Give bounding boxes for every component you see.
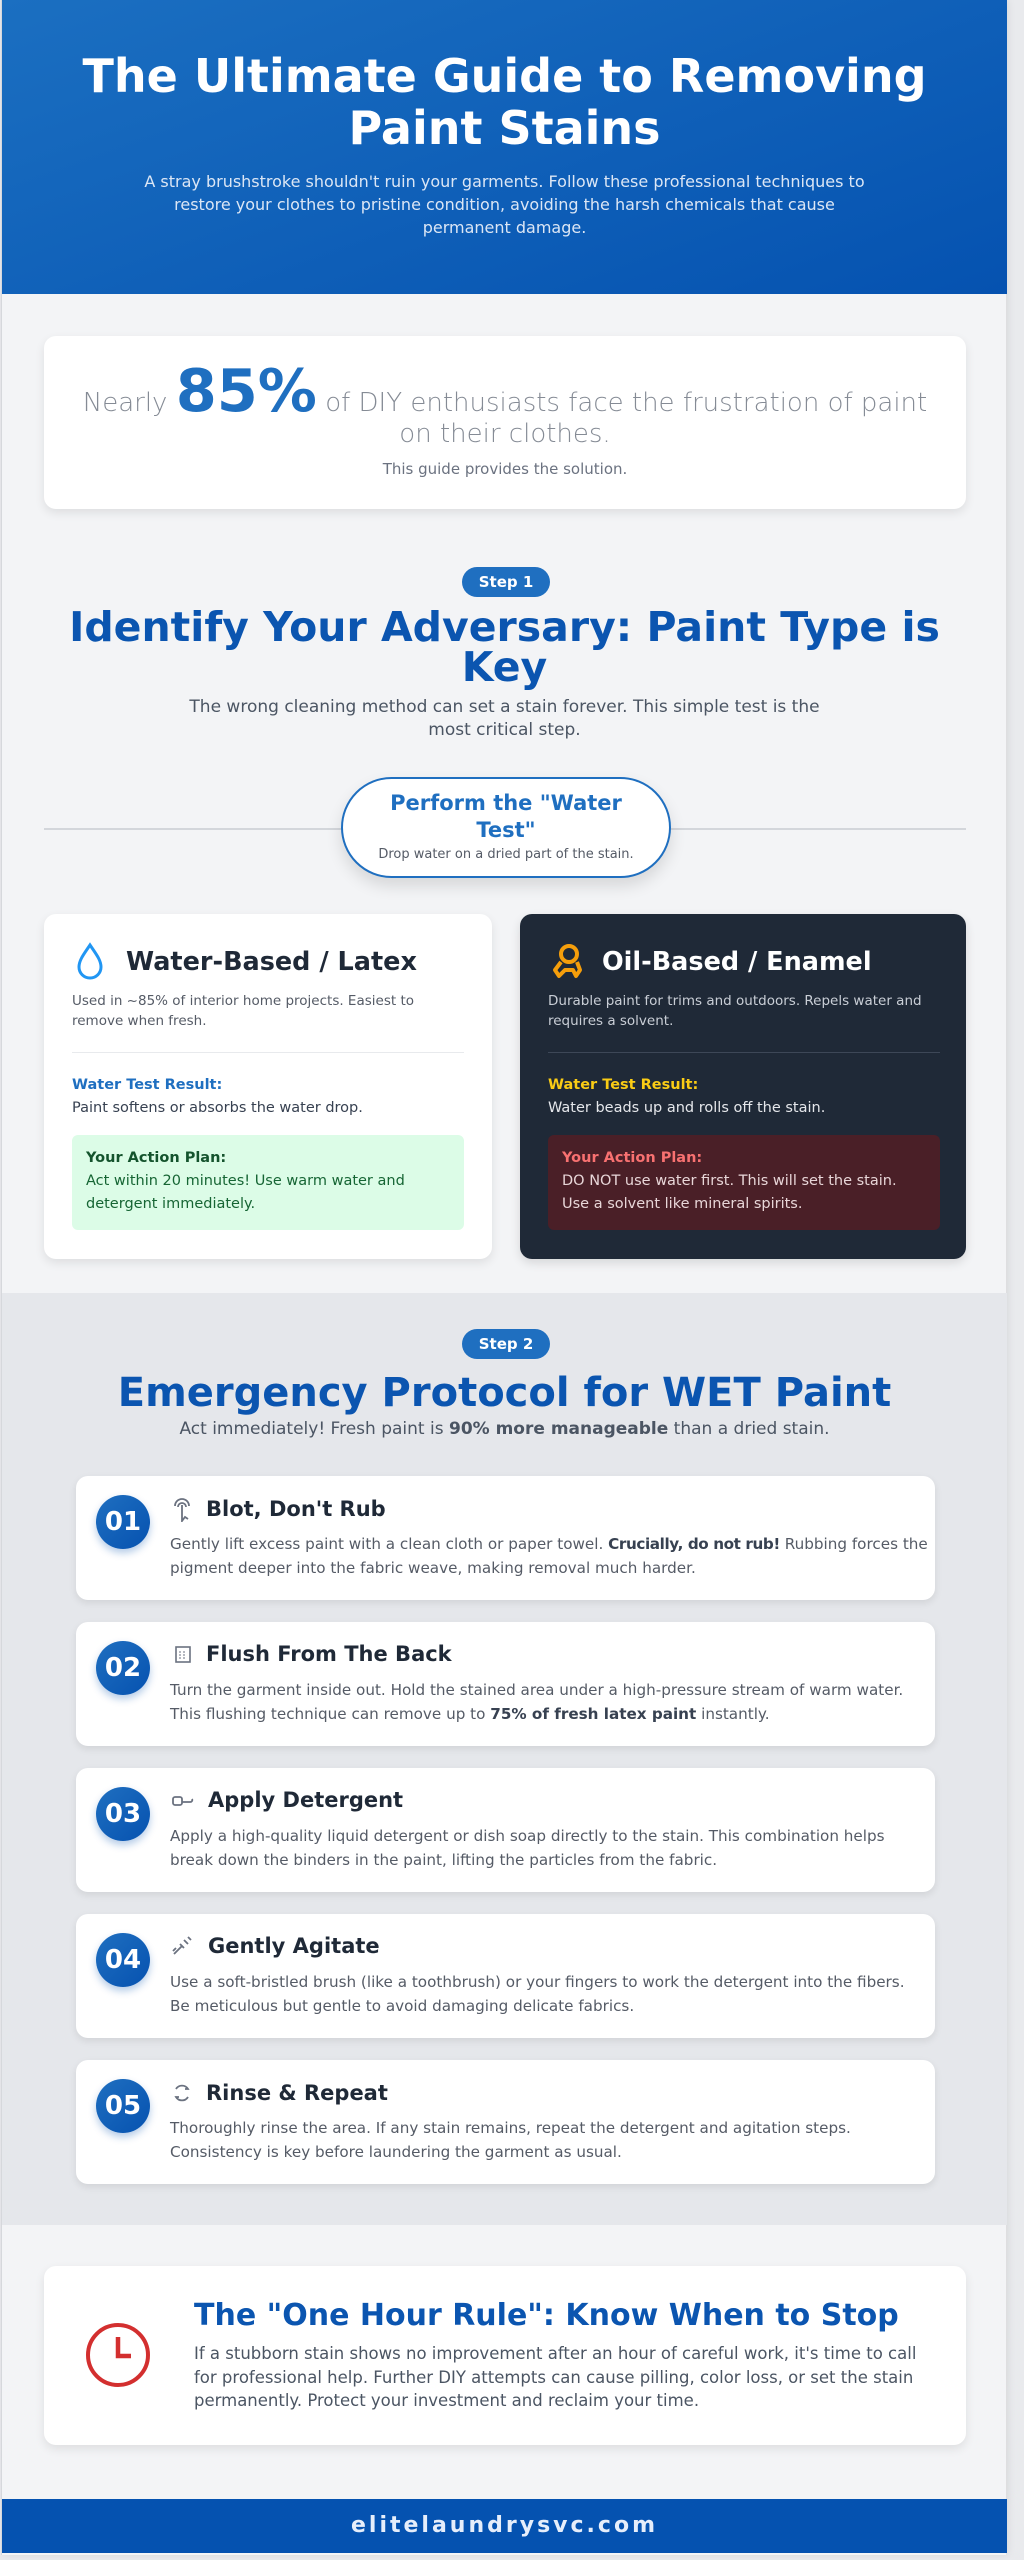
- step 03: 03: [105, 1799, 141, 1829]
- step 2 subtitle: Act immediately! Fresh paint is 90% more manageable than a dried stain.: [179, 1419, 830, 1439]
- step 01: Blot, Don't Rub: [206, 1497, 386, 1521]
- test result: Water Test Result:: [72, 1077, 222, 1093]
- action plan: Your Action Plan:: [562, 1150, 702, 1166]
- step 01: 01: [105, 1507, 141, 1537]
- step 03: Apply Detergent: [208, 1788, 403, 1812]
- step 1 badge: Step 1: [479, 573, 533, 591]
- step 04: [76, 1914, 935, 2038]
- test result: Water Test Result:: [548, 1077, 698, 1093]
- step 02: Flush From The Back: [206, 1642, 452, 1666]
- action plan: [548, 1135, 940, 1230]
- footer: elitelaundrysvc.com: [351, 2513, 658, 2538]
- stat text: Nearly 85% of DIY enthusiasts face the frustration of paint on their clothes.: [83, 356, 927, 449]
- header: [2, 0, 1007, 294]
- step 05: Rinse & Repeat: [206, 2081, 388, 2105]
- title: The Ultimate Guide to Removing Paint Stains: [82, 49, 926, 155]
- step 1 subtitle: The wrong cleaning method can set a stain forever. This simple test is the most critical step.: [189, 697, 820, 740]
- subtitle: A stray brushstroke shouldn't ruin your garments. Follow these professional techniques to restore your clothes to pristine condition, avoiding the harsh chemicals that cause permanent damage.: [144, 172, 865, 237]
- test result: [548, 1077, 825, 1116]
- panel: water-based: [44, 914, 492, 1259]
- action plan: Your Action Plan:: [86, 1150, 226, 1166]
- rule text: If a stubborn stain shows no improvement after an hour of careful work, it's time to call for professional help. Further DIY attempts can cause pilling, color loss, or set the stain permanently. Protect your investment and reclaim your time.: [194, 2344, 916, 2410]
- section: step 2: [2, 1293, 1007, 2225]
- icon: clock: [86, 2323, 150, 2387]
- card title: Water-Based / Latex: [126, 947, 417, 977]
- step 04: Use a soft-bristled brush (like a toothbrush) or your fingers to work the detergent into the fibers. Be meticulous but gentle to avoid damaging delicate fabrics.: [170, 1973, 905, 2015]
- action plan: DO NOT use water first. This will set the stain. Use a solvent like mineral spirits.: [562, 1173, 897, 1212]
- step 02: [76, 1622, 935, 1746]
- step 1 heading: Identify Your Adversary: Paint Type is Key: [69, 603, 940, 691]
- step 05: 05: [105, 2091, 141, 2121]
- step 04: Gently Agitate: [208, 1934, 380, 1958]
- step 2 badge: [462, 1329, 550, 1359]
- icon: water drop: [78, 942, 102, 980]
- description: Used in ~85% of interior home projects. Easiest to remove when fresh.: [72, 993, 414, 1029]
- test result: Water beads up and rolls off the stain.: [548, 1100, 825, 1116]
- step 05: Thoroughly rinse the area. If any stain remains, repeat the detergent and agitation steps. Consistency is key before laundering the garment as usual.: [170, 2119, 851, 2161]
- step 01: Gently lift excess paint with a clean cloth or paper towel. Crucially, do not rub! Rubbing forces the pigment deeper into the fabric weave, making removal much harder.: [170, 1535, 928, 1577]
- step 02: Turn the garment inside out. Hold the stained area under a high-pressure stream of warm water. This flushing technique can remove up to 75% of fresh latex paint instantly.: [170, 1681, 903, 1723]
- action plan: [72, 1135, 464, 1230]
- footer: [2, 2499, 1007, 2553]
- test result: Paint softens or absorbs the water drop.: [72, 1100, 363, 1116]
- step 1 badge: [462, 567, 550, 597]
- card title: Oil-Based / Enamel: [602, 947, 872, 977]
- step 03: Apply a high-quality liquid detergent or dish soap directly to the stain. This combination helps break down the binders in the paint, lifting the particles from the fabric.: [170, 1827, 885, 1869]
- water test pill: Drop water on a dried part of the stain.: [378, 847, 634, 862]
- stat note: This guide provides the solution.: [383, 460, 627, 478]
- step 05: [76, 2060, 935, 2184]
- step 04: 04: [105, 1945, 141, 1975]
- icon: oil: [553, 944, 582, 978]
- step 03: [76, 1768, 935, 1892]
- water test pill: Test": [476, 818, 536, 842]
- water test pill: Perform the "Water: [390, 791, 622, 815]
- step 2 badge: Step 2: [479, 1335, 533, 1353]
- step 02: 02: [105, 1653, 141, 1683]
- action plan: Act within 20 minutes! Use warm water and detergent immediately.: [86, 1173, 405, 1212]
- stat card: [44, 336, 966, 509]
- description: Durable paint for trims and outdoors. Repels water and requires a solvent.: [548, 993, 922, 1029]
- step 2 heading: Emergency Protocol for WET Paint: [118, 1370, 891, 1416]
- rule title: The "One Hour Rule": Know When to Stop: [194, 2298, 899, 2333]
- test result: [72, 1077, 363, 1116]
- panel: oil-based: [520, 914, 966, 1259]
- panel: one hour rule: [44, 2266, 966, 2445]
- step 01: [76, 1476, 935, 1600]
- water test pill: [341, 777, 671, 878]
